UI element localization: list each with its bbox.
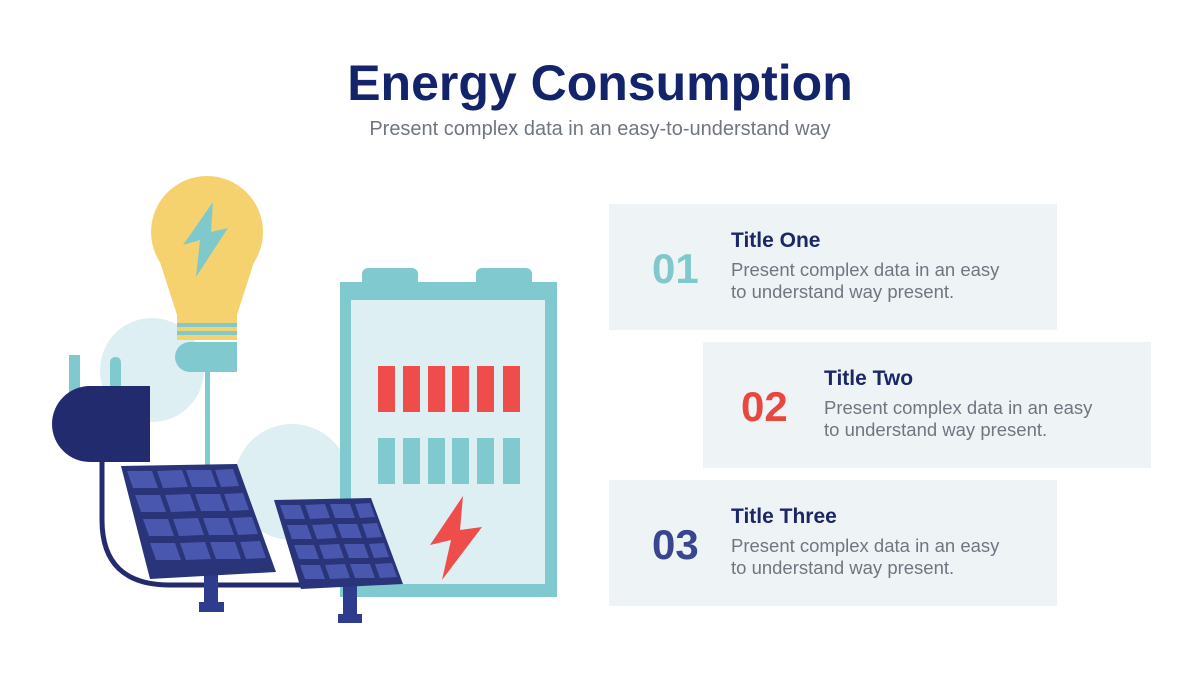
- title one: Title One: [731, 229, 820, 252]
- number 01: 01: [652, 245, 699, 292]
- solar panel 2: [274, 498, 403, 623]
- text one: to understand way present.: [731, 281, 954, 302]
- subtitle: Present complex data in an easy-to-understand way: [369, 118, 831, 140]
- illustration: energy: [52, 176, 557, 623]
- text two: to understand way present.: [824, 419, 1047, 440]
- title three: Title Three: [731, 505, 837, 528]
- number 03: 03: [652, 521, 699, 568]
- bulb: [151, 176, 263, 475]
- text one: Present complex data in an easy: [731, 259, 999, 280]
- plug: [52, 386, 310, 585]
- card 02: [703, 342, 1151, 468]
- text two: [824, 397, 1092, 440]
- text three: [731, 535, 1000, 578]
- plug prongs: [69, 355, 121, 397]
- title: Energy Consumption: [347, 55, 853, 111]
- number 02: 02: [741, 383, 788, 430]
- card 03: [609, 480, 1057, 606]
- text two: Present complex data in an easy: [824, 397, 1092, 418]
- title two: Title Two: [824, 367, 913, 390]
- background circles: [100, 318, 350, 540]
- card 01: [609, 204, 1057, 330]
- text three: to understand way present.: [731, 557, 954, 578]
- text three: Present complex data in an easy: [731, 535, 999, 556]
- solar panel 1: [121, 464, 276, 612]
- text one: [731, 259, 1000, 302]
- battery: [340, 268, 557, 597]
